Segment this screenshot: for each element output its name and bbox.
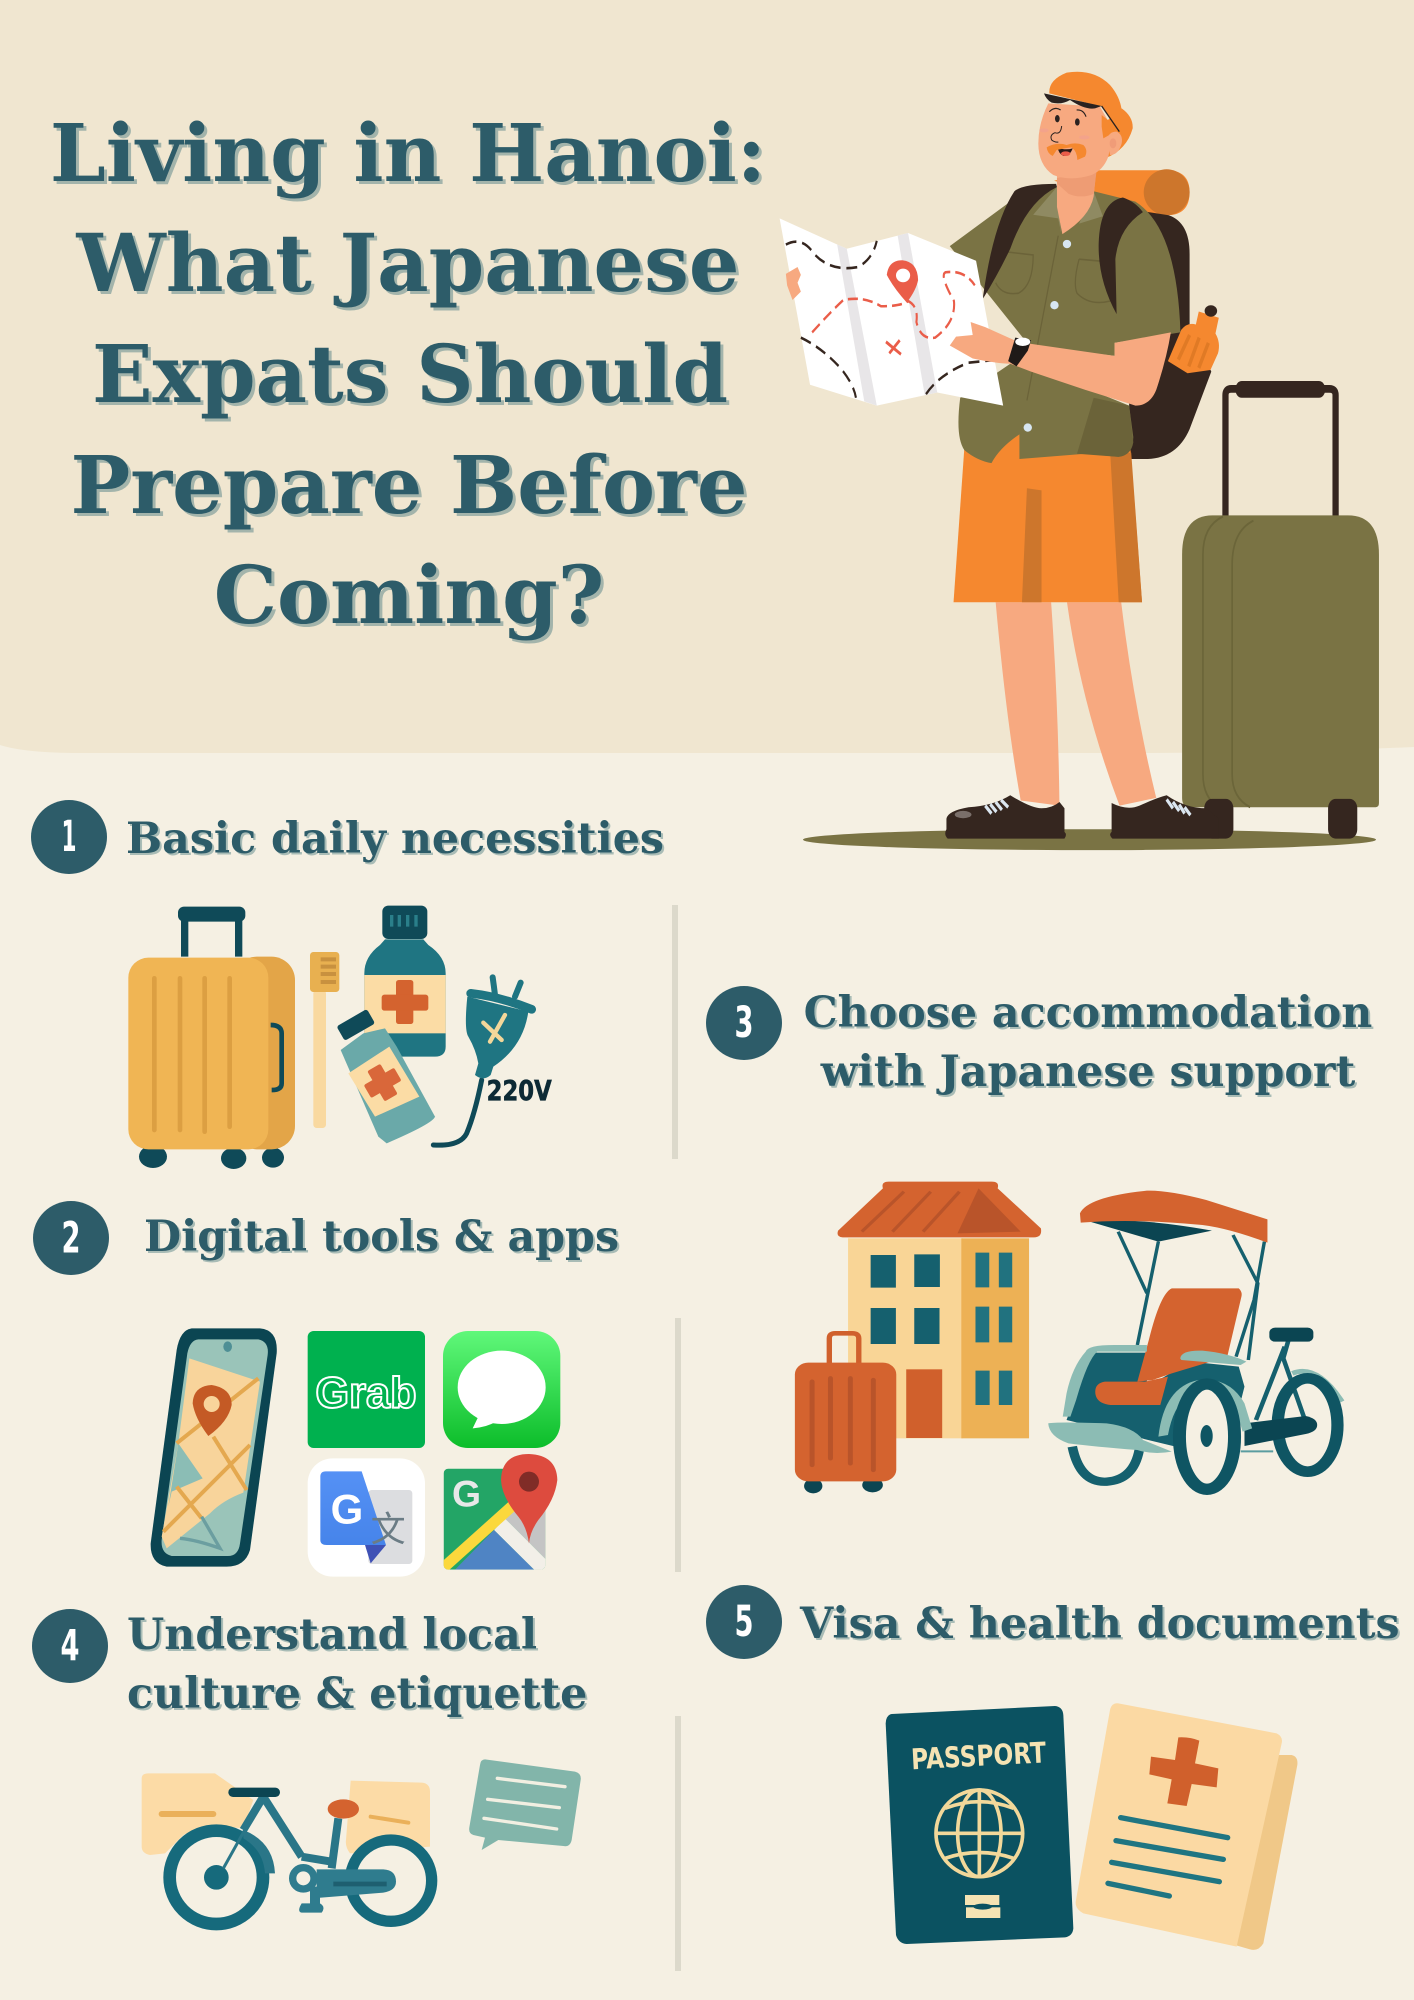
ointment tube (336, 1009, 435, 1143)
shorts (954, 434, 1142, 602)
section 4 heading: Understand local (127, 1610, 537, 1660)
suitcase (128, 907, 295, 1169)
building (838, 1182, 1041, 1438)
plug (433, 977, 532, 1145)
icon group: passport and health document (886, 1703, 1297, 1950)
icon group: daily necessities (128, 906, 552, 1169)
section 1 heading: Basic daily necessities (126, 814, 664, 864)
ground shadow (803, 829, 1376, 850)
suitcase (1182, 381, 1379, 839)
health document (1076, 1703, 1297, 1950)
title: Prepare Before (71, 438, 747, 532)
section 4 heading (127, 1610, 587, 1719)
divider (675, 1318, 681, 1572)
shoes (945, 795, 1219, 839)
icon group: accommodation and cyclo (795, 1182, 1342, 1493)
icon group: digital apps (151, 1328, 560, 1577)
title: Living in Hanoi: (50, 106, 766, 200)
phone with map (151, 1328, 277, 1567)
app icon: Grab (308, 1331, 425, 1448)
legs (996, 602, 1156, 806)
app icon: Google Translate: G (331, 1485, 363, 1532)
watch (1008, 338, 1031, 366)
section 3 heading: with Japanese support (820, 1047, 1355, 1097)
header background (0, 0, 1414, 753)
orange suitcase (795, 1333, 896, 1493)
icon group: bicycle and speech bubble (142, 1759, 581, 1924)
shirt (950, 187, 1180, 463)
section 4 number (32, 1609, 108, 1683)
app icon: Messages (443, 1331, 560, 1448)
title: Expats Should (92, 327, 728, 421)
divider (672, 905, 678, 1159)
bicycle (170, 1788, 432, 1924)
section 4 heading: culture & etiquette (127, 1669, 587, 1719)
medicine bottle (364, 906, 446, 1057)
app icon: Google Maps: G (452, 1473, 481, 1515)
section 5 number (706, 1585, 782, 1659)
section 5 number: 5 (734, 1598, 754, 1647)
title: Coming? (214, 548, 604, 642)
section 3 number: 3 (734, 999, 754, 1048)
map (780, 218, 1003, 406)
voltage label: 220V (487, 1074, 552, 1107)
title: What Japanese (76, 216, 739, 310)
speech bubble (469, 1759, 581, 1850)
illustration: traveller with map and suitcase (780, 72, 1379, 850)
straps (983, 184, 1143, 314)
section 3 number (706, 986, 782, 1060)
passport (886, 1706, 1073, 1944)
section 2 heading: Digital tools & apps (144, 1212, 619, 1262)
app icon: Grab: Grab (315, 1369, 417, 1418)
app icon: Google Translate (308, 1458, 425, 1577)
section 3 heading (804, 988, 1372, 1097)
section 2 number: 2 (62, 1214, 80, 1264)
toothbrush (310, 952, 339, 1128)
section 1 number: 1 (62, 813, 76, 862)
section 5 heading: Visa & health documents (799, 1599, 1400, 1649)
divider (675, 1716, 681, 1971)
neck and collar (1033, 162, 1103, 234)
hand over map (950, 322, 1014, 364)
section 2 number (33, 1201, 109, 1275)
title (50, 106, 766, 642)
section 4 number: 4 (60, 1622, 80, 1671)
cyclo (1048, 1191, 1342, 1489)
section 3 heading: Choose accommodation (804, 988, 1372, 1038)
section 1 number (31, 800, 107, 874)
app icon: Google Translate: 文 (371, 1511, 406, 1550)
arm and hand (1010, 332, 1171, 406)
culture cards (142, 1773, 430, 1855)
passport: PASSPORT (910, 1735, 1047, 1776)
app icon: Google Maps (442, 1454, 557, 1570)
backpack (1054, 169, 1219, 459)
head (1038, 72, 1133, 178)
